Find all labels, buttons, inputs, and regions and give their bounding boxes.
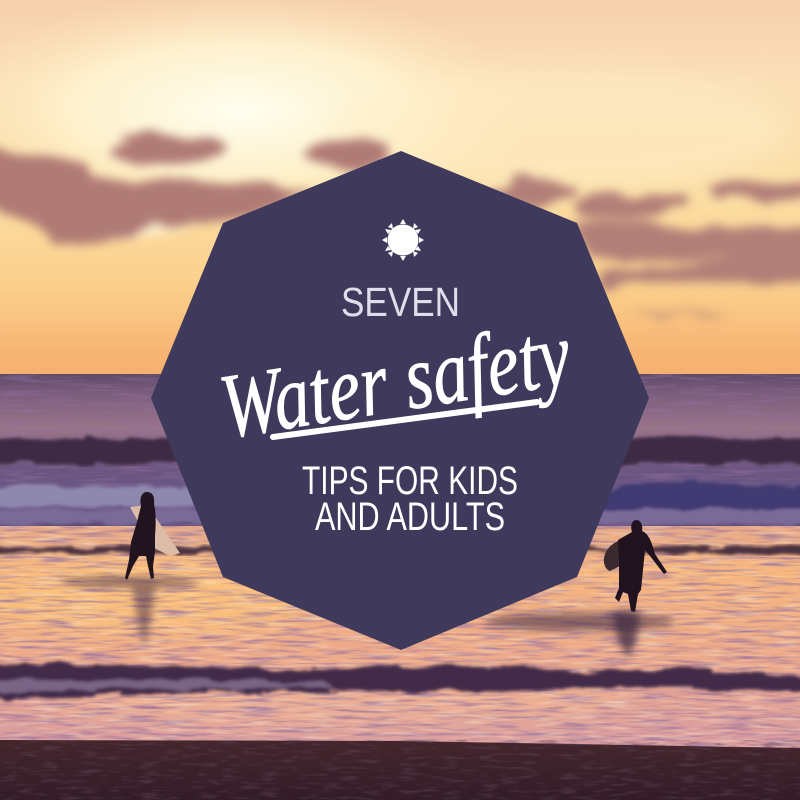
background: sunset sky (0, 0, 800, 378)
surfer silhouette right (604, 520, 667, 612)
background: dark sand (0, 740, 800, 800)
surfer silhouette left (125, 492, 180, 580)
underline stroke (273, 402, 537, 437)
panel: navy octagon (151, 151, 649, 650)
clouds right (486, 180, 800, 317)
background: sea (0, 374, 800, 530)
clouds left (0, 134, 387, 245)
subheading: tips for kids and adults: TIPS FOR KIDS (302, 459, 518, 503)
background: shallow water (0, 526, 800, 748)
icon: sun (382, 219, 424, 261)
subheading: tips for kids and adults: AND ADULTS (315, 495, 505, 539)
breaking wave in foreground (0, 664, 800, 700)
subheading: tips for kids and adults (302, 459, 518, 539)
heading: SEVEN: SEVEN (341, 279, 460, 325)
heading: Water safety: Water safety (213, 302, 577, 458)
